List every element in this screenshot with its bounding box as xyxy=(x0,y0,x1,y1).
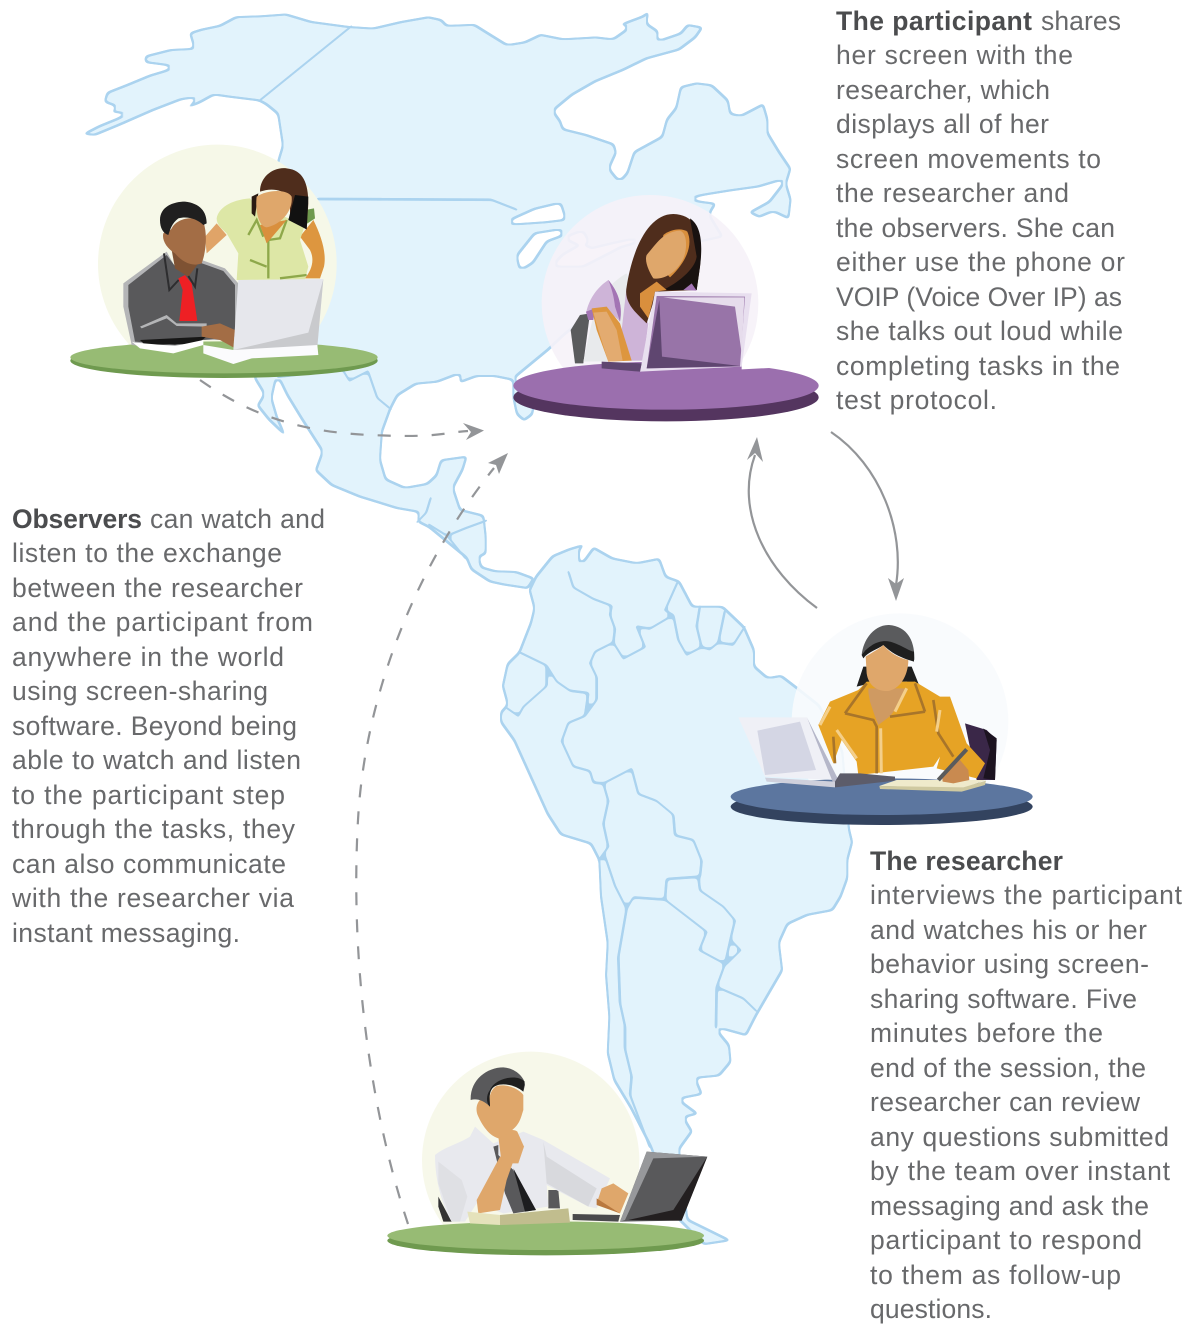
map: North America xyxy=(80,10,792,589)
text block: the participant xyxy=(836,6,1125,415)
text block: the researcher: minutes before the xyxy=(870,1018,1103,1048)
text block: observers: listen to the exchange xyxy=(12,538,282,568)
text block: the participant: she talks out loud while xyxy=(836,316,1123,346)
arrow: observers to participant (dashed) xyxy=(200,380,484,440)
text block: observers: can watch and xyxy=(150,504,325,534)
text block: observers: with the researcher via xyxy=(11,883,294,913)
text block: the researcher: interviews the participant xyxy=(870,880,1183,910)
text block: the participant: displays all of her xyxy=(836,109,1049,139)
arrow: researcher to participant xyxy=(747,437,817,608)
text block: the researcher: participant to respond xyxy=(870,1225,1142,1255)
text block: the participant: her screen with the xyxy=(836,40,1073,70)
text block: the participant: shares xyxy=(1041,6,1121,36)
text block: observers: able to watch and listen xyxy=(12,745,301,775)
text block: observers: anywhere in the world xyxy=(12,642,284,672)
figure: observers, man and woman at laptop xyxy=(70,145,378,378)
text block: the researcher: messaging and ask the xyxy=(870,1191,1149,1221)
text block: observers xyxy=(11,504,325,948)
text block: the participant: screen movements to xyxy=(836,144,1101,174)
text block: observers: between the researcher xyxy=(12,573,303,603)
text block: the participant: The participant xyxy=(836,6,1032,36)
text block: the participant: VOIP (Voice Over IP) as xyxy=(836,282,1122,312)
figure: researcher, woman writing at laptop xyxy=(731,613,1033,825)
text block: observers: using screen-sharing xyxy=(12,676,268,706)
figure: observer, man with hand on chin at laptop xyxy=(387,1052,707,1255)
text block: the participant: test protocol. xyxy=(836,385,997,415)
arrow: observers at bottom to participant (dashed) xyxy=(356,453,508,1224)
text block: observers: through the tasks, they xyxy=(12,814,296,844)
arrow: participant to researcher xyxy=(831,432,904,601)
text block: the participant: the observers. She can xyxy=(836,213,1115,243)
text block: observers: instant messaging. xyxy=(12,918,240,948)
text block: observers: to the participant step xyxy=(12,780,285,810)
text block: the participant: researcher, which xyxy=(836,75,1050,105)
text block: the participant: either use the phone or xyxy=(836,247,1125,277)
text block: observers: can also communicate xyxy=(12,849,286,879)
text block: the researcher: by the team over instant xyxy=(870,1156,1171,1186)
text block: observers: and the participant from xyxy=(12,607,313,637)
figure: participant, woman at laptop xyxy=(513,195,819,421)
text block: the participant: completing tasks in the xyxy=(836,351,1120,381)
text block: the researcher: questions. xyxy=(870,1294,992,1324)
text block: observers: software. Beyond being xyxy=(12,711,297,741)
text block: the researcher: sharing software. Five xyxy=(870,984,1137,1014)
text block: the participant: the researcher and xyxy=(836,178,1069,208)
text block: the researcher: to them as follow-up xyxy=(870,1260,1121,1290)
text block: the researcher: researcher can review xyxy=(870,1087,1141,1117)
text block: the researcher: any questions submitted xyxy=(870,1122,1169,1152)
text block: observers: Observers xyxy=(12,504,142,534)
text block: the researcher: The researcher xyxy=(870,846,1063,876)
map: South America xyxy=(500,543,853,1245)
text block: the researcher: end of the session, the xyxy=(870,1053,1146,1083)
text block: the researcher: behavior using screen- xyxy=(870,949,1149,979)
text block: the researcher xyxy=(870,846,1183,1324)
text block: the researcher: and watches his or her xyxy=(870,915,1147,945)
